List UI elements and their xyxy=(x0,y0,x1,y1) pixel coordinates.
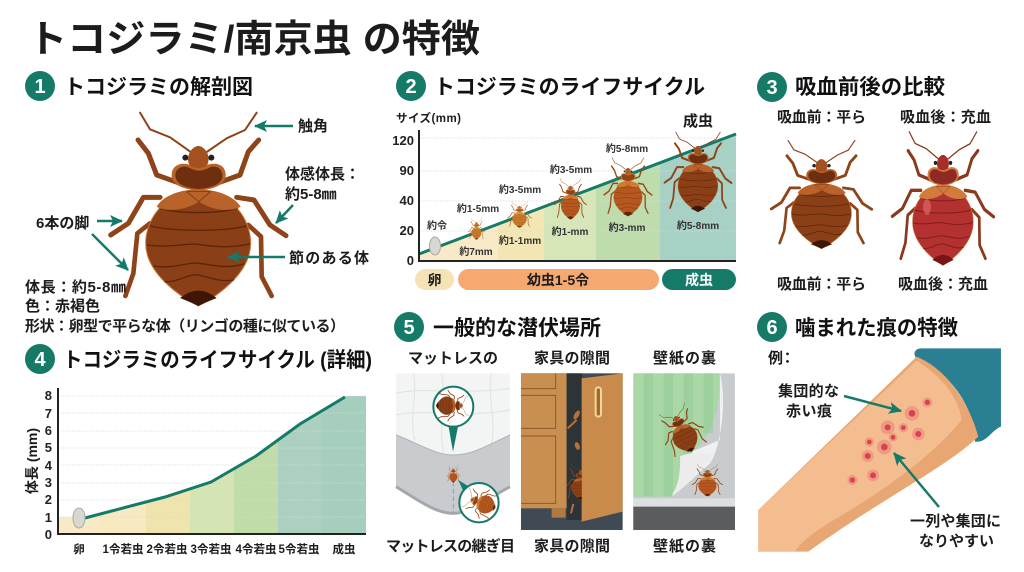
icon: egg xyxy=(430,237,440,255)
title: トコジラミ/南京虫 の特徴 xyxy=(28,19,480,61)
chart: size by stage: 約5-8mm xyxy=(677,219,719,232)
chart: body length by stage: 1 xyxy=(45,510,52,525)
heading: life cycle: 2 xyxy=(405,76,417,98)
label: segmented body: 節のある体 xyxy=(289,249,369,267)
chart: size by stage: 約5-8mm xyxy=(606,142,648,155)
label: mattress bottom: マットレスの継ぎ目 xyxy=(386,537,515,555)
heading: hiding places xyxy=(394,312,601,342)
heading: bite marks: 6 xyxy=(766,317,778,339)
callout: lines or clusters xyxy=(894,453,1001,550)
chart: body length by stage: 8 xyxy=(45,388,52,403)
callout: grouped red marks xyxy=(778,382,901,420)
icon: nymph 2 xyxy=(508,201,531,228)
heading: life cycle xyxy=(396,71,705,101)
heading: detailed life cycle: 4 xyxy=(34,349,46,371)
chart: body length by stage: 体長 (mm) xyxy=(24,428,40,494)
chart: body length by stage: 2令若虫 xyxy=(147,542,188,556)
illustration: wallpaper xyxy=(633,373,735,530)
label: after top: 吸血後：充血 xyxy=(900,108,991,126)
chart: body length by stage: 0 xyxy=(45,527,52,542)
callout: grouped red marks: 集団的な xyxy=(778,382,839,400)
chart: body length by stage: 2 xyxy=(45,492,52,507)
heading: comparison: 吸血前後の比較 xyxy=(795,76,945,99)
chart: body length by stage: 4令若虫 xyxy=(236,542,277,556)
label: furniture bottom: 家具の隙間 xyxy=(534,538,610,555)
callout: lines or clusters: なりやすい xyxy=(919,533,994,550)
label: wallpaper bottom: 壁紙の裏 xyxy=(653,537,716,555)
label: furniture top: 家具の隙間 xyxy=(534,350,610,367)
chart: size by stage: 90 xyxy=(400,163,414,178)
label: body length: 約5-8㎜ xyxy=(285,186,337,203)
stage bar: 成虫 xyxy=(685,272,713,288)
heading: detailed life cycle xyxy=(25,344,372,374)
chart: size by stage: 40 xyxy=(400,193,414,208)
chart: size by stage: 約令 xyxy=(427,219,447,232)
stage bar: 幼虫1-5令 xyxy=(527,272,589,288)
chart: body length by stage: 5令若虫 xyxy=(279,542,320,556)
chart: size by stage: 約1-5mm xyxy=(457,202,499,215)
chart: body length by stage: 卵 xyxy=(73,542,85,556)
chart: size by stage: 20 xyxy=(400,223,414,238)
chart: size by stage: 約1-mm xyxy=(552,225,588,238)
chart: size by stage xyxy=(392,111,736,268)
text block: specs: 色：赤褐色 xyxy=(25,297,100,315)
icon: adult xyxy=(665,132,731,212)
icon: bed bug anatomy xyxy=(111,113,286,306)
label: mattress top: マットレスの xyxy=(408,350,498,367)
icon: nymph 3 xyxy=(555,179,586,220)
label: before top: 吸血前：平ら xyxy=(777,108,866,126)
chart: body length by stage: 1令若虫 xyxy=(103,542,144,556)
icon: fed bug xyxy=(892,132,994,265)
icon: nymph 4 xyxy=(604,158,652,216)
stage bar: 卵 xyxy=(428,272,442,288)
label: body length xyxy=(276,165,360,223)
label: six legs: 6本の脚 xyxy=(36,214,89,232)
label: wallpaper top: 壁紙の裏 xyxy=(653,349,716,367)
label: antenna: 触角 xyxy=(298,117,328,135)
icon: unfed bug xyxy=(771,140,872,249)
label: before bottom: 吸血前：平ら xyxy=(777,275,866,293)
panel: before and after feeding xyxy=(757,72,994,293)
panel: life cycle xyxy=(392,71,736,290)
chart: body length by stage: 5 xyxy=(45,440,52,455)
heading: life cycle: トコジラミのライフサイクル xyxy=(434,76,705,99)
chart: size by stage: サイズ(mm) xyxy=(396,111,461,125)
text block: specs xyxy=(25,279,345,335)
icon: egg xyxy=(73,508,85,528)
illustration: mattress xyxy=(396,373,510,522)
heading: hiding places: 一般的な潜伏場所 xyxy=(433,316,601,340)
chart: size by stage: 約7mm xyxy=(459,245,493,258)
chart: body length by stage: 4 xyxy=(45,458,53,473)
chart: size by stage: 約3-mm xyxy=(609,221,645,234)
panel: hiding places xyxy=(386,312,735,555)
chart: body length by stage: 成虫 xyxy=(332,542,356,556)
heading: detailed life cycle: トコジラミのライフサイクル (詳細) xyxy=(63,349,372,372)
stage bar xyxy=(415,269,736,290)
callout: grouped red marks: 赤い痕 xyxy=(786,403,832,420)
chart: size by stage: 約1-1mm xyxy=(499,234,541,247)
chart: size by stage: 約3-5mm xyxy=(499,183,541,196)
heading: comparison xyxy=(757,72,945,102)
chart: body length by stage: 6 xyxy=(45,423,52,438)
panel: anatomy xyxy=(25,71,369,335)
chart: size by stage: 約3-5mm xyxy=(550,163,592,176)
label: example: 例： xyxy=(768,350,795,367)
label: antenna xyxy=(255,117,328,135)
illustration: arm with bites xyxy=(758,348,1001,552)
chart: body length by stage xyxy=(24,388,366,556)
label: six legs xyxy=(36,214,128,270)
panel: bite marks xyxy=(757,312,1001,552)
chart: size by stage: 0 xyxy=(407,253,414,268)
icon: nymph 1 xyxy=(468,218,485,240)
label: body length: 体感体長： xyxy=(285,165,360,183)
heading: bite marks xyxy=(757,312,958,342)
chart: body length by stage: 7 xyxy=(45,406,52,421)
heading: anatomy: トコジラミの解剖図 xyxy=(64,76,253,99)
chart: size by stage: 120 xyxy=(392,133,414,148)
chart: size by stage: 成虫 xyxy=(683,112,713,130)
panel: detailed life cycle xyxy=(24,344,372,556)
text block: specs: 形状：卵型で平らな体（リンゴの種に似ている） xyxy=(25,317,345,335)
chart: body length by stage: 3 xyxy=(45,475,52,490)
illustration: furniture gap xyxy=(521,373,623,530)
label: after bottom: 吸血後：充血 xyxy=(898,275,988,293)
heading: bite marks: 噛まれた痕の特徴 xyxy=(795,317,958,340)
text block: specs: 体長：約5-8㎜ xyxy=(25,279,126,296)
chart: body length by stage: 3令若虫 xyxy=(191,542,232,556)
heading: hiding places: 5 xyxy=(403,317,415,339)
callout: lines or clusters: 一列や集団に xyxy=(910,512,1001,530)
heading: anatomy xyxy=(25,71,253,101)
heading: anatomy: 1 xyxy=(34,76,46,98)
heading: comparison: 3 xyxy=(766,77,778,99)
